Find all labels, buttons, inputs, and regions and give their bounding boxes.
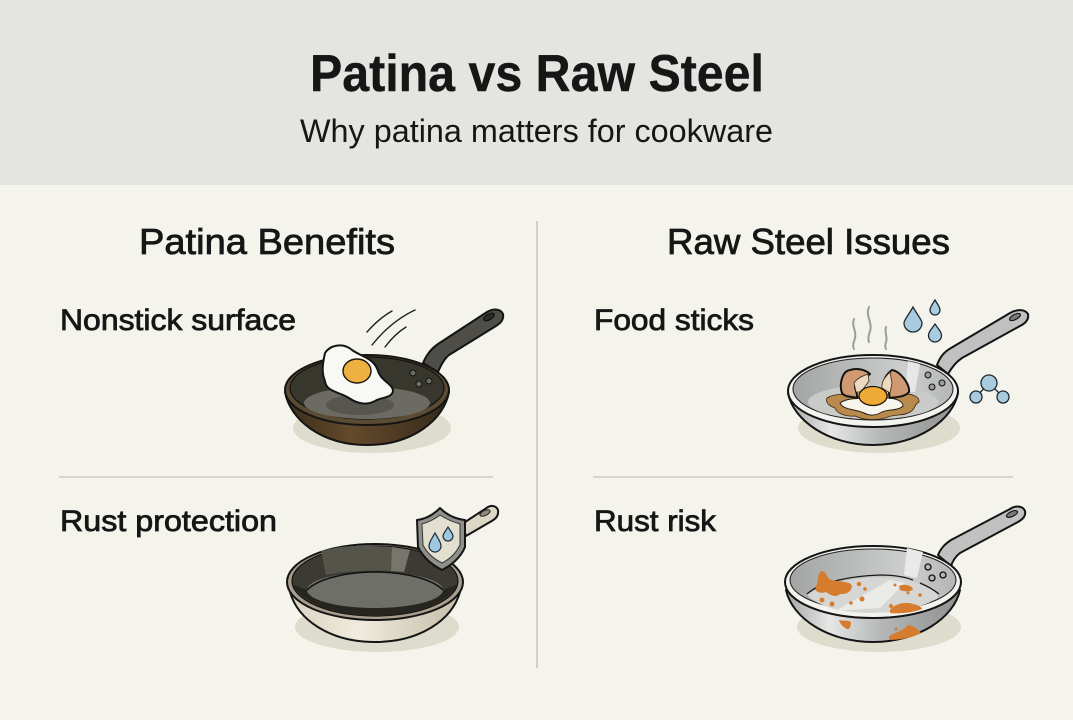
divider: right (593, 476, 1013, 478)
icon: shield with water drops (417, 508, 465, 570)
panel: raw steel issues (593, 221, 1028, 652)
heading: raw steel issues: Raw Steel Issues (667, 221, 950, 262)
icon: molecule (970, 375, 1009, 403)
divider: left (59, 476, 493, 478)
label: rust risk: Rust risk (594, 505, 717, 538)
icon: seasoned pan with shield (287, 506, 498, 652)
subtitle: Why patina matters for cookware (300, 113, 773, 149)
icon: dark pan with sliding egg (285, 310, 503, 453)
icon: steel pan with stuck egg (788, 300, 1028, 453)
icon: rusty steel pan (785, 507, 1025, 652)
label: nonstick surface: Nonstick surface (60, 304, 296, 337)
icon: water drops (904, 300, 942, 342)
header band (0, 0, 1073, 185)
label: food sticks: Food sticks (594, 304, 754, 337)
title: Patina vs Raw Steel (310, 45, 764, 103)
label: rust protection: Rust protection (60, 505, 277, 538)
panel: patina benefits (59, 221, 503, 652)
center column divider (536, 221, 538, 668)
heading: patina benefits: Patina Benefits (139, 221, 395, 262)
icon: steam (853, 307, 887, 349)
rust patches (816, 571, 922, 640)
